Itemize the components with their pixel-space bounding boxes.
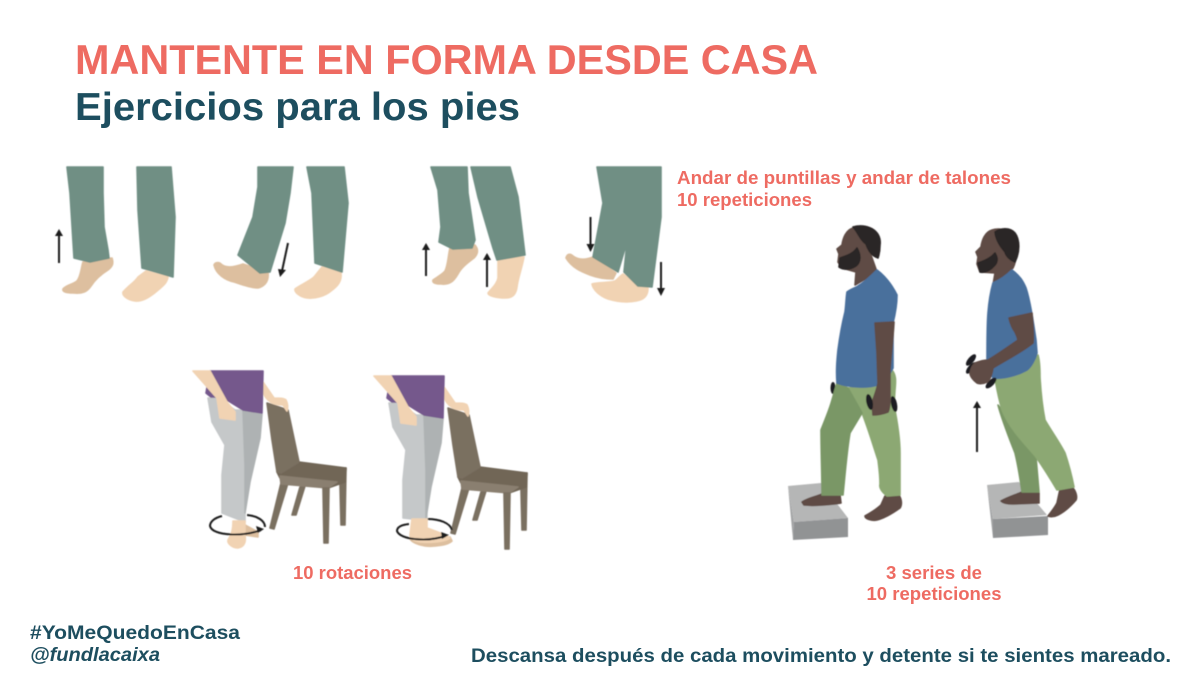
trousers — [995, 355, 1074, 492]
person legs and torso — [374, 376, 469, 546]
rotation arrow back — [247, 515, 265, 527]
hashtag and handle: #YoMeQuedoEnCasa — [30, 623, 240, 644]
trousers — [821, 370, 900, 496]
rotation arrow front — [397, 524, 449, 539]
rotation arrow back — [427, 519, 452, 530]
rotation arrow front — [210, 516, 264, 535]
footer note: Descansa después de cada movimiento y detente si te sientes mareado. — [471, 646, 1171, 667]
feet pose 2: left toes raised — [214, 167, 348, 298]
hashtag and handle — [30, 623, 240, 666]
back dumbbell — [830, 382, 836, 394]
panel: man with dumbbells, on tiptoe — [964, 229, 1077, 538]
label: rotations: 10 rotaciones — [293, 563, 412, 583]
label: series: 10 repeticiones — [866, 584, 1002, 604]
arrows: up, pose 3 — [422, 243, 491, 287]
hashtag and handle: @fundlacaixa — [30, 645, 160, 666]
arrow: down, pose 2 — [278, 243, 288, 277]
panel: man with dumbbells, standing — [788, 226, 901, 540]
arrow: up, pose 1 — [55, 229, 63, 263]
arrows: down, pose 4 — [586, 217, 665, 296]
feet pose 1: left heel raised — [63, 167, 175, 301]
title: MANTENTE EN FORMA DESDE CASA — [75, 36, 818, 83]
t-shirt — [837, 270, 897, 387]
chair — [267, 403, 346, 543]
head and neck — [837, 226, 880, 285]
panel: ankle rotation figure 2 with chair — [374, 376, 527, 549]
label: tiptoe instructions: 10 repeticiones — [677, 190, 812, 210]
feet pose 4: both toes raised — [566, 167, 661, 302]
label: tiptoe instructions: Andar de puntillas y andar de talones — [677, 168, 1011, 188]
arm and dumbbell — [865, 322, 899, 415]
step block — [987, 482, 1048, 538]
chair — [448, 408, 527, 549]
person legs and torso — [193, 371, 288, 548]
arrow: up — [973, 401, 981, 452]
arm and dumbbells — [964, 313, 1033, 390]
step block — [788, 483, 848, 540]
label: series: 3 series de — [886, 563, 982, 583]
head and neck — [976, 229, 1019, 285]
subtitle: Ejercicios para los pies — [75, 86, 520, 129]
label: tiptoe instructions — [677, 168, 1011, 210]
label: series — [866, 563, 1002, 604]
feet — [1001, 488, 1077, 517]
t-shirt — [987, 270, 1037, 378]
feet pose 3: both heels raised — [431, 167, 525, 298]
feet — [802, 494, 901, 520]
panel: tiptoe and heel walking illustrations — [55, 167, 665, 302]
panel: ankle rotation figure 1 with chair — [193, 371, 346, 548]
